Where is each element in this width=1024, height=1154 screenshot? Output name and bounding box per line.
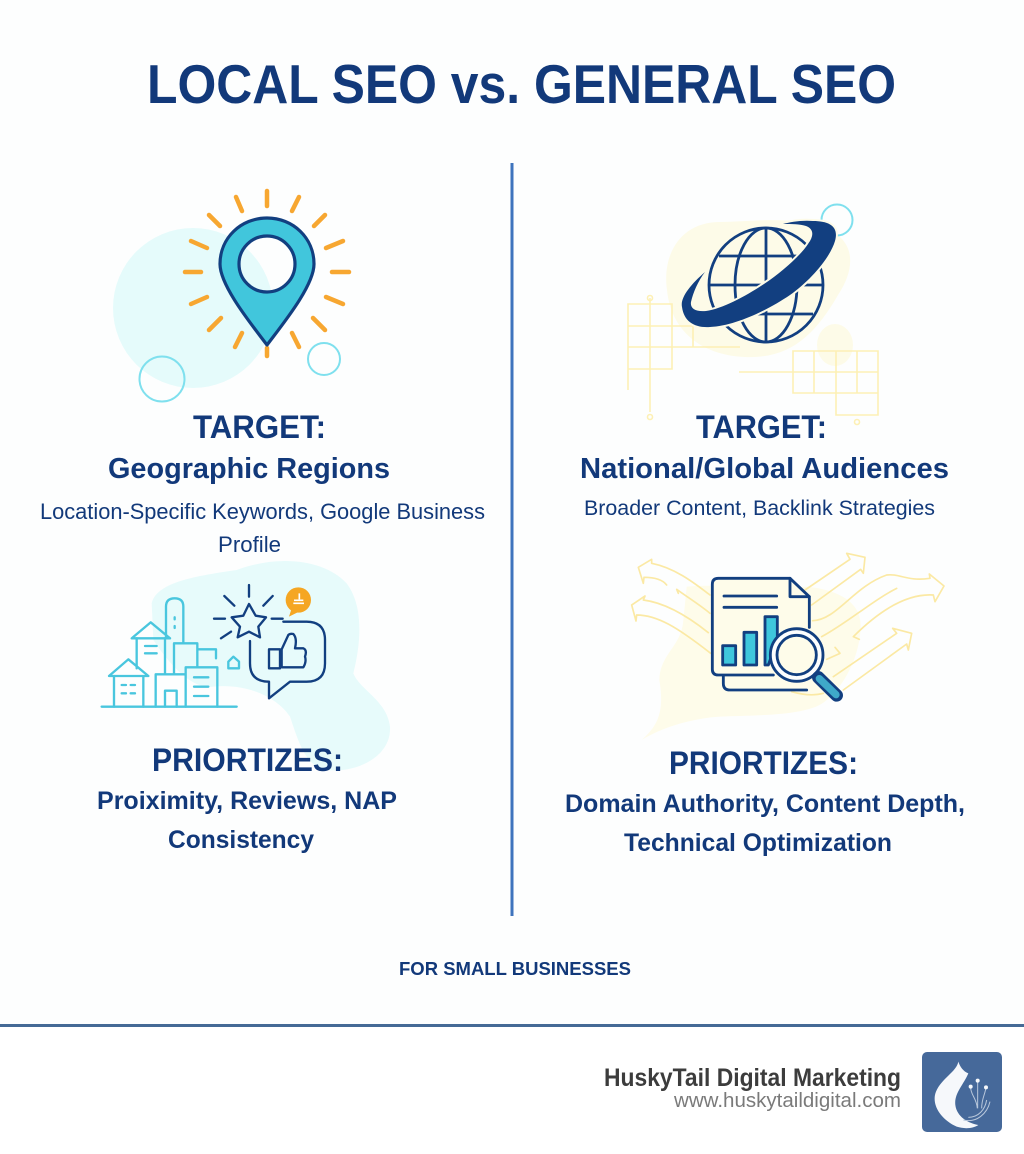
icon: location pin with rays bbox=[113, 191, 349, 402]
caption: for small businesses: FOR SMALL BUSINESSES bbox=[399, 959, 631, 979]
text: local tactics: Location-Specific Keywords, Google Business bbox=[40, 499, 485, 524]
heading: prioritizes local: PRIORTIZES: bbox=[152, 742, 343, 778]
heading: national and global audiences: National/Global Audiences bbox=[580, 453, 949, 485]
icon: orange badge bbox=[286, 587, 311, 617]
text: general priorities bbox=[565, 790, 965, 857]
text: local priorities: Consistency bbox=[168, 826, 314, 854]
text: local tactics: Profile bbox=[218, 532, 281, 557]
title: LOCAL SEO vs. GENERAL SEO bbox=[147, 53, 896, 115]
central divider bbox=[510, 163, 514, 916]
text: local tactics bbox=[40, 499, 485, 557]
heading: target local: TARGET: bbox=[193, 409, 326, 445]
icon: globe with orbit bbox=[628, 204, 878, 424]
icon: city with review and thumbs up bbox=[102, 561, 390, 770]
brand url: www.huskytaildigital.com bbox=[673, 1090, 901, 1112]
icon: report with magnifying glass bbox=[632, 553, 944, 740]
text: local priorities: Proiximity, Reviews, NAP bbox=[97, 787, 397, 815]
text: general priorities: Domain Authority, Content Depth, bbox=[565, 790, 965, 818]
icon: brand logo bbox=[922, 1052, 1002, 1132]
brand name: HuskyTail Digital Marketing bbox=[604, 1064, 901, 1092]
text: general priorities: Technical Optimization bbox=[624, 829, 892, 857]
text: general tactics: Broader Content, Backlink Strategies bbox=[584, 497, 935, 520]
text: local priorities bbox=[97, 787, 397, 854]
panel: general SEO bbox=[565, 204, 965, 857]
panel: local SEO bbox=[40, 191, 485, 854]
heading: prioritizes general: PRIORTIZES: bbox=[669, 745, 858, 781]
footer bbox=[0, 1024, 1024, 1154]
heading: target general: TARGET: bbox=[696, 409, 827, 445]
heading: geographic regions: Geographic Regions bbox=[108, 453, 390, 485]
